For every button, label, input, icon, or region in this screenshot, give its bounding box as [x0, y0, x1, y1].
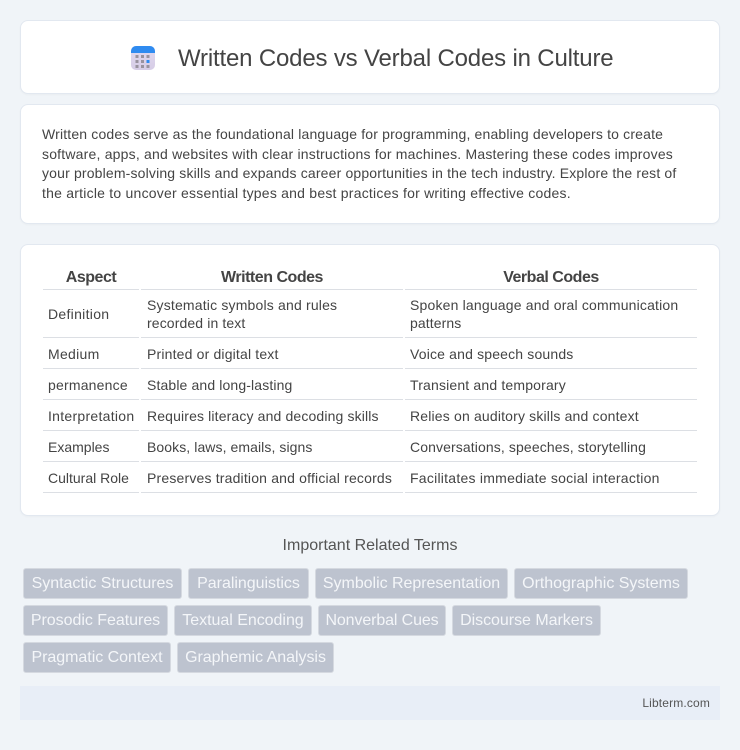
intro paragraph: software, apps, and websites with clear instructions for machines. Mastering these codes improves	[42, 146, 673, 162]
tag	[315, 568, 508, 599]
tag: Syntactic Structures	[32, 575, 173, 592]
row: interpretation: Requires literacy and decoding skills	[147, 408, 379, 424]
tag: Nonverbal Cues	[325, 612, 439, 629]
row: definition	[48, 297, 678, 331]
tag: Orthographic Systems	[522, 575, 680, 592]
row: examples: Examples	[48, 439, 109, 455]
tag	[23, 568, 182, 599]
row: medium: Medium	[48, 346, 100, 362]
footer bar	[20, 686, 720, 720]
title: Written Codes vs Verbal Codes in Culture	[178, 45, 613, 72]
row: cultural role: Cultural Role	[48, 470, 129, 486]
row: medium	[48, 346, 573, 362]
row: definition: patterns	[410, 315, 461, 331]
comparison table panel	[20, 244, 720, 516]
row: permanence: permanence	[48, 377, 128, 393]
row: cultural role	[48, 470, 660, 486]
footer credit: Libterm.com	[642, 696, 710, 710]
row: cultural role: Facilitates immediate social interaction	[410, 470, 660, 486]
intro paragraph	[42, 126, 676, 201]
table header: verbal codes: Verbal Codes	[503, 269, 599, 286]
table header: written codes: Written Codes	[221, 269, 323, 286]
row: interpretation: Relies on auditory skills and context	[410, 408, 639, 424]
intro paragraph: your problem-solving skills and expands career opportunities in the tech industry. Explore the rest of	[42, 165, 676, 181]
row: permanence	[48, 377, 566, 393]
tag: Pragmatic Context	[31, 649, 163, 666]
tag: Paralinguistics	[197, 575, 300, 592]
intro paragraph: Written codes serve as the foundational language for programming, enabling developers to create	[42, 126, 663, 142]
tag: Discourse Markers	[460, 612, 593, 629]
related terms tags	[23, 568, 688, 673]
tag	[23, 642, 171, 673]
row: definition: Spoken language and oral communication	[410, 297, 678, 313]
tag	[514, 568, 688, 599]
tag: Graphemic Analysis	[185, 649, 326, 666]
tag	[452, 605, 601, 636]
row: cultural role: Preserves tradition and official records	[147, 470, 392, 486]
row: definition: Systematic symbols and rules	[147, 297, 337, 313]
row: medium: Printed or digital text	[147, 346, 279, 362]
tag	[23, 605, 168, 636]
row: interpretation: Interpretation	[48, 408, 134, 424]
row: examples	[48, 439, 646, 455]
tag: Prosodic Features	[31, 612, 160, 629]
tag	[177, 642, 334, 673]
related terms heading: Important Related Terms	[283, 537, 457, 554]
row: permanence: Stable and long-lasting	[147, 377, 292, 393]
row: examples: Conversations, speeches, storytelling	[410, 439, 646, 455]
intro text panel	[20, 104, 720, 224]
table header: aspect: Aspect	[66, 269, 116, 286]
row: interpretation	[48, 408, 639, 424]
icon: calendar grid	[131, 46, 155, 70]
row: medium: Voice and speech sounds	[410, 346, 573, 362]
tag: Symbolic Representation	[323, 575, 500, 592]
row: permanence: Transient and temporary	[410, 377, 566, 393]
tag	[318, 605, 446, 636]
intro paragraph: the article to uncover essential types and best practices for writing effective codes.	[42, 185, 571, 201]
tag	[174, 605, 312, 636]
row: definition: recorded in text	[147, 315, 245, 331]
row: definition: Definition	[48, 306, 109, 322]
tag: Textual Encoding	[182, 612, 304, 629]
tag	[188, 568, 309, 599]
row: examples: Books, laws, emails, signs	[147, 439, 312, 455]
header card	[20, 20, 720, 94]
